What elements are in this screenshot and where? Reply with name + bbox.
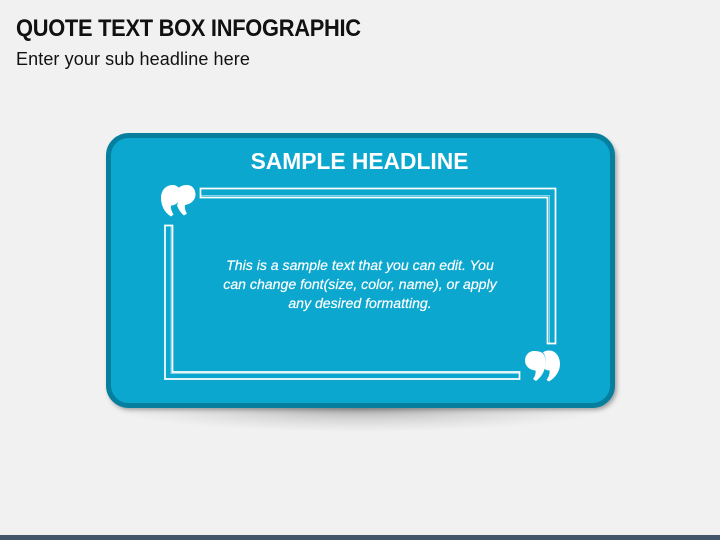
- icon: closing quote mark: [525, 350, 560, 382]
- body text: [223, 257, 498, 312]
- footer bar: [0, 535, 720, 540]
- card headline: SAMPLE HEADLINE: [251, 148, 468, 174]
- body text: can change font(size, color, name), or apply: [223, 276, 497, 292]
- body text: This is a sample text that you can edit. You: [226, 257, 494, 273]
- icon: opening quote mark: [161, 185, 196, 216]
- card shadow: [105, 137, 617, 432]
- body text: any desired formatting.: [288, 295, 432, 311]
- title: QUOTE TEXT BOX INFOGRAPHIC: [16, 15, 361, 42]
- frame: left and bottom bracket: [165, 226, 520, 379]
- frame: top and right bracket: [200, 188, 556, 344]
- card panel: [108, 136, 612, 406]
- subtitle: Enter your sub headline here: [16, 49, 250, 69]
